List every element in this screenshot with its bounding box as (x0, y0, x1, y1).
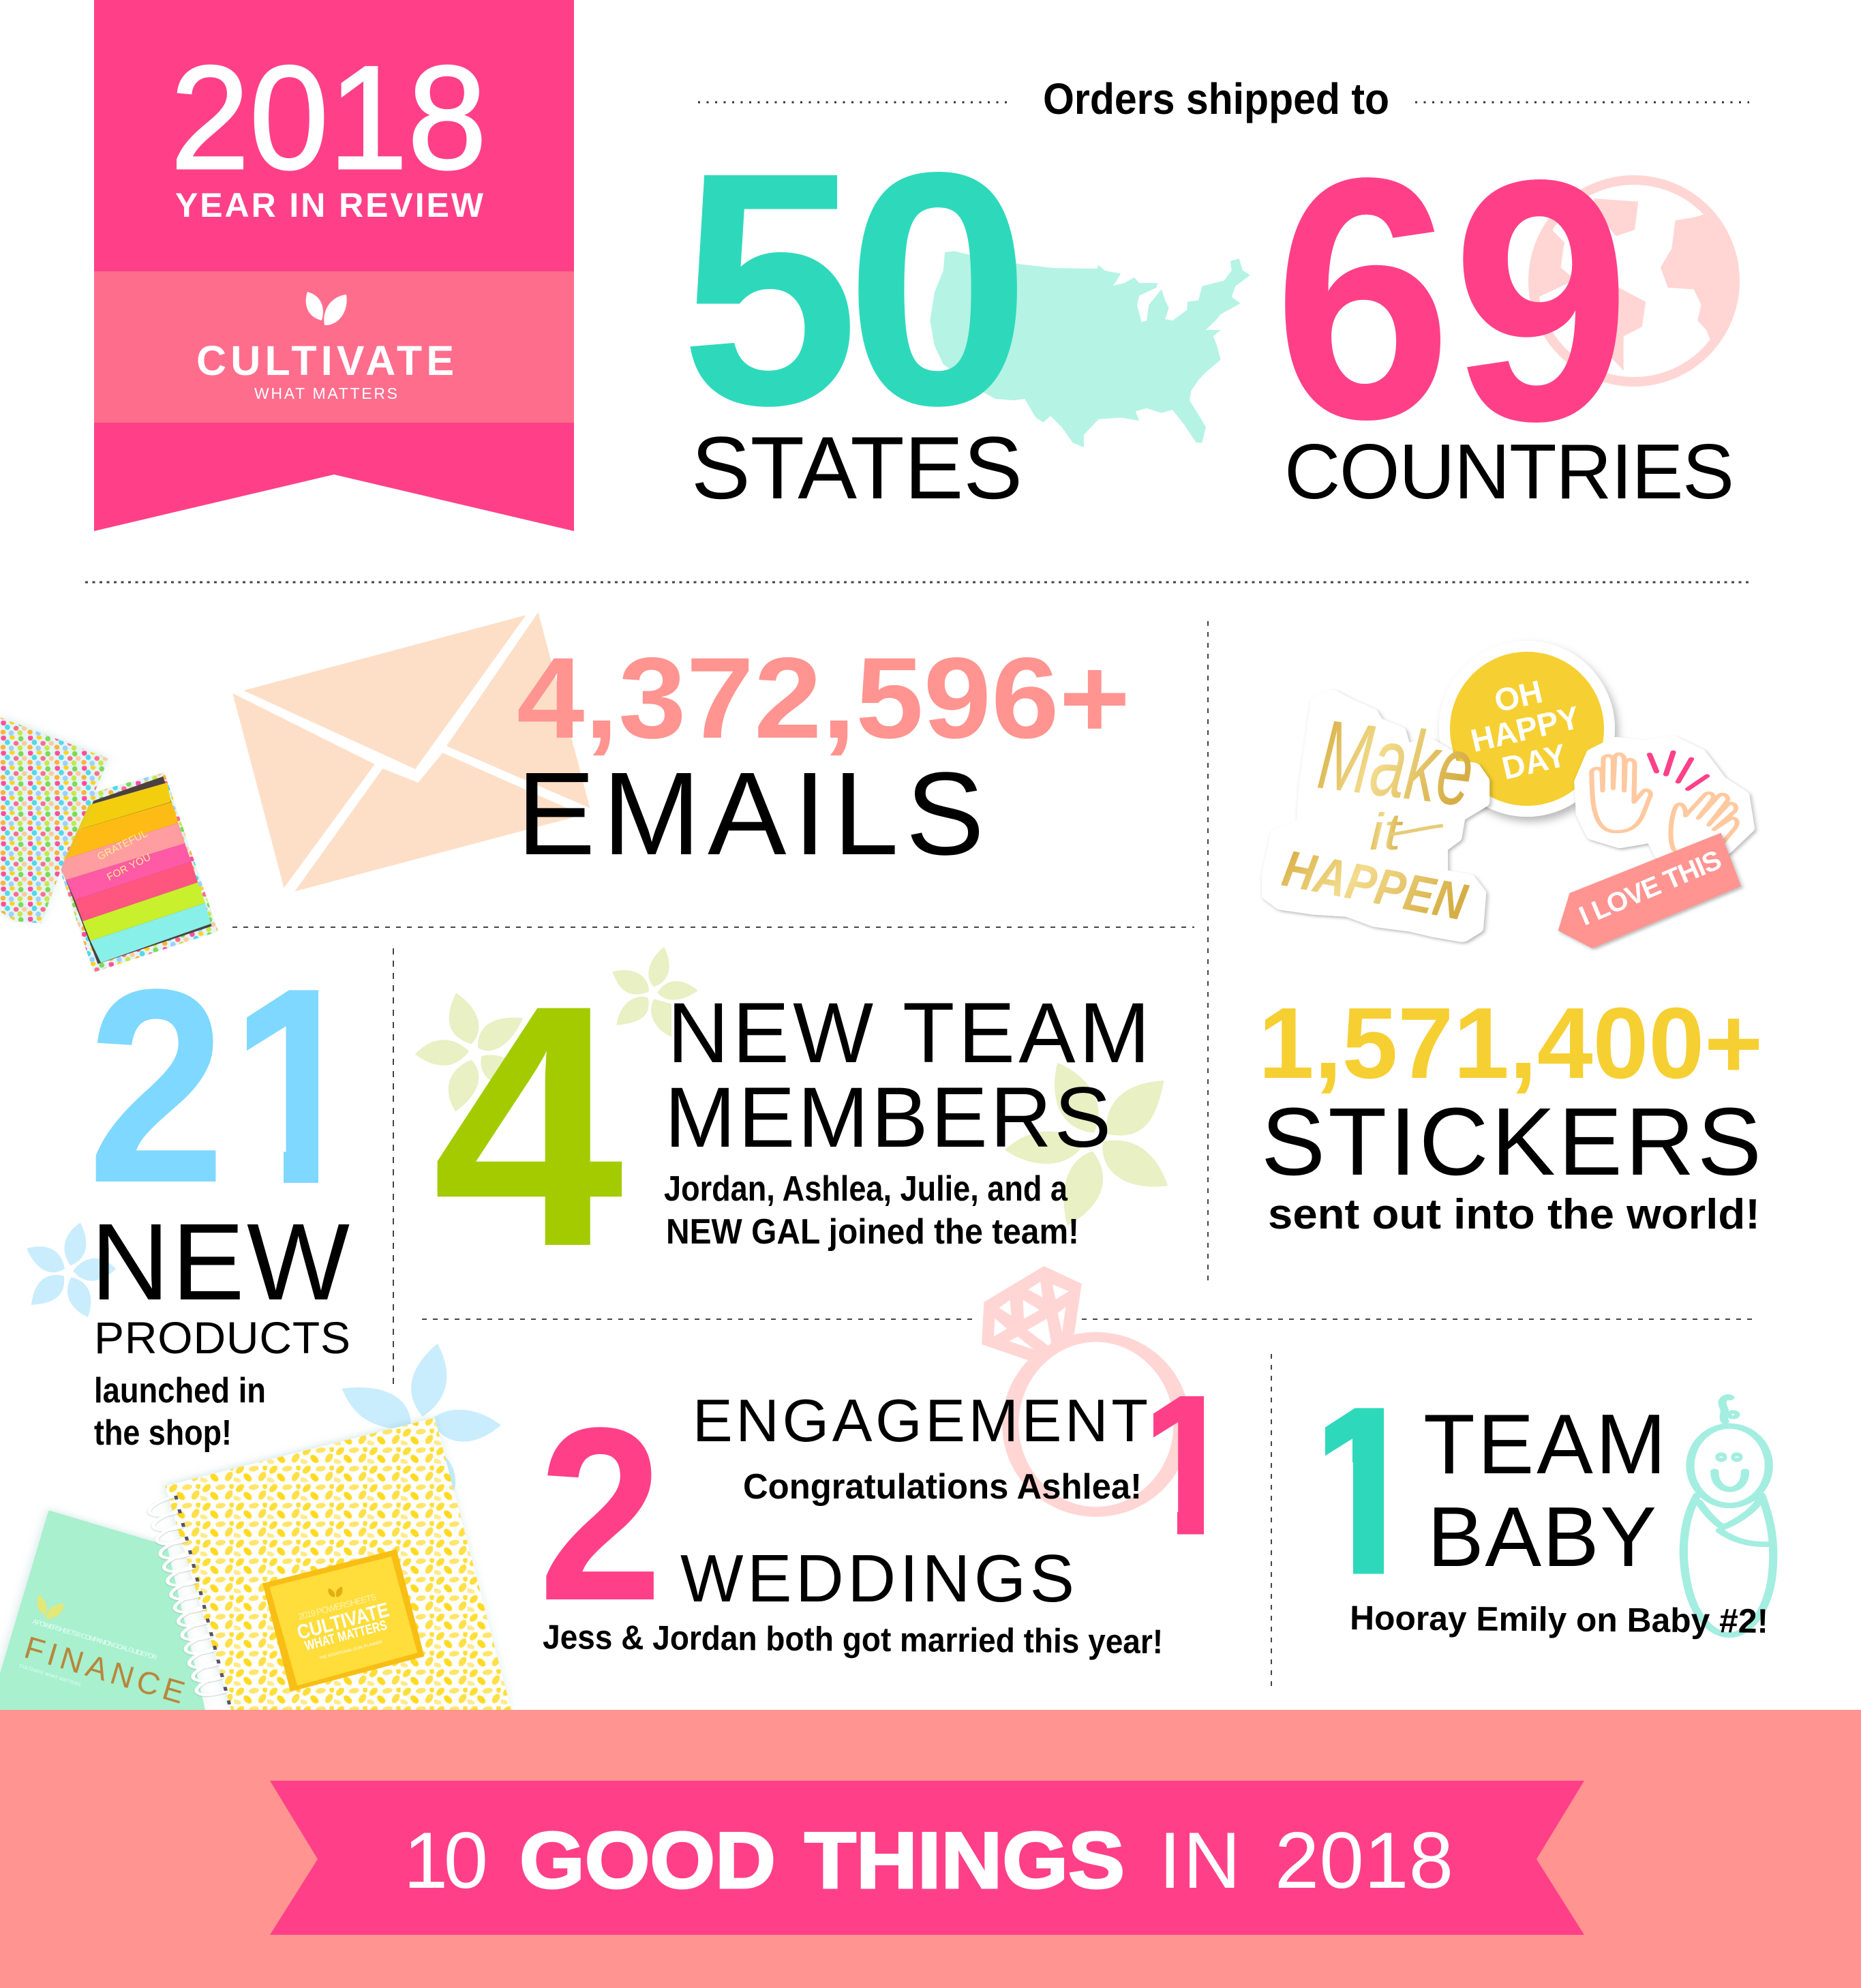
sticker: i love this (1558, 833, 1741, 948)
icon: globe (1533, 180, 1736, 382)
logo: what matters: WHAT MATTERS (254, 385, 397, 402)
text: the shop: the shop! (94, 1413, 232, 1453)
label: weddings: WEDDINGS (680, 1541, 1074, 1616)
logo: cultivate: CULTIVATE (196, 337, 454, 384)
ribbon: 10 good things in 2018: THINGS (804, 1816, 1125, 1905)
photo: gift box (0, 717, 218, 972)
sticker: oh happy day (1439, 641, 1615, 817)
sticker: make it happen: Make (1313, 699, 1479, 827)
sticker: make it happen: HAPPEN (1278, 839, 1472, 932)
footer band (0, 1710, 1861, 1988)
label: members: MEMBERS (665, 1070, 1111, 1165)
icon: blue flower left (27, 1222, 116, 1317)
text: 2019 powersheets: 2019 POWERSHEETS (297, 1591, 378, 1622)
label: states: STATES (691, 418, 1023, 517)
stat: 50: 5 (680, 104, 859, 475)
stat: 50: 0 (845, 104, 1031, 475)
ribbon: 10 good things in 2018: 10 (404, 1816, 488, 1905)
stickers (1271, 641, 1747, 948)
sticker: i love this: I LOVE THIS (1575, 845, 1726, 931)
text: for you: FOR YOU (105, 852, 153, 884)
ribbon: 10 good things in 2018: GOOD (519, 1816, 776, 1905)
stat: emails count: 4,372,596+ (517, 633, 1130, 762)
icon: green flowers (415, 947, 1168, 1225)
text: cultivate what matters small: CULTIVATE WHAT MATTERS (18, 1663, 81, 1688)
stat: 69: 6 (1273, 106, 1452, 490)
text: jess and jordan: Jess & Jordan both got married this year! (543, 1618, 1163, 1661)
text: new gal joined: NEW GAL joined the team! (666, 1212, 1079, 1252)
text: launched in: launched in (94, 1371, 266, 1411)
ribbon: 10 good things in 2018: 2018 (1275, 1816, 1453, 1905)
stat: stickers count: 1,571,400+ (1258, 987, 1763, 1100)
map: united states (930, 251, 1250, 447)
icon: baby (1684, 1397, 1773, 1635)
text: orders shipped to: Orders shipped to (1043, 74, 1389, 123)
sticker: high five hands (1582, 741, 1747, 854)
stat: 4: 4 (432, 934, 626, 1319)
stat: 21: 2 (87, 931, 226, 1240)
icon: engagement ring (982, 1266, 1182, 1512)
sticker: make it happen: it (1370, 803, 1403, 861)
stat: 50 (680, 104, 1031, 475)
label: emails: EMAILS (517, 747, 984, 879)
label: engagement: ENGAGEMENT (693, 1387, 1148, 1454)
stat: 1 teal: 1 (1298, 1357, 1430, 1623)
label: products: PRODUCTS (94, 1312, 350, 1363)
text: what matters: WHAT MATTERS (303, 1618, 389, 1654)
stat: 2: 2 (539, 1376, 663, 1652)
icon: logo leaves (306, 292, 347, 325)
subheading: year in review: YEAR IN REVIEW (175, 186, 484, 224)
text: cultivate: CULTIVATE (294, 1599, 391, 1644)
icon: envelope (232, 612, 590, 891)
text: hooray emily: Hooray Emily on Baby #2! (1350, 1599, 1768, 1640)
text: jordan ashlea julie: Jordan, Ashlea, Julie, and a (664, 1169, 1068, 1209)
text: finance: FINANCE (20, 1629, 189, 1711)
photo: yellow planner (149, 1418, 511, 1710)
heading: 2018: 2018 (170, 35, 487, 200)
label: baby: BABY (1427, 1490, 1656, 1584)
stat: 21 (95, 989, 318, 1183)
label: countries: COUNTRIES (1284, 429, 1734, 515)
text: grateful: GRATEFUL (95, 828, 149, 863)
text: the intentional goal planner: THE INTENTIONAL GOAL PLANNER (319, 1640, 383, 1661)
text: sent out into the world: sent out into the world! (1268, 1191, 1760, 1238)
label: team: TEAM (1423, 1398, 1666, 1492)
photo: finance book (0, 1510, 205, 1711)
text: congratulations ashlea: Congratulations Ashlea! (743, 1467, 1142, 1507)
stat: 1 pink: 1 (1133, 1355, 1243, 1576)
label: new: NEW (91, 1201, 350, 1323)
stat: 69: 9 (1452, 108, 1631, 492)
sticker: oh happy day: HAPPY (1467, 699, 1583, 759)
stat: 69 (1273, 106, 1631, 492)
label: new team: NEW TEAM (667, 986, 1150, 1081)
sticker: make it happen (1271, 695, 1481, 936)
label: stickers: STICKERS (1261, 1087, 1761, 1195)
ribbon: 10 good things in 2018 (270, 1781, 1584, 1935)
ribbon: 10 good things in 2018: IN (1159, 1816, 1241, 1905)
box lid (0, 717, 108, 923)
banner: 2018 year in review (94, 0, 574, 531)
sticker: oh happy day: DAY (1498, 736, 1569, 786)
sticker: oh happy day: OH (1491, 673, 1546, 719)
icon: blue flower behind planner (342, 1344, 501, 1497)
text: companion goal guide: A POWERSHEETS® COMPANION GOAL GUIDE FOR (31, 1618, 158, 1662)
stat: 21: 1 (223, 931, 376, 1240)
